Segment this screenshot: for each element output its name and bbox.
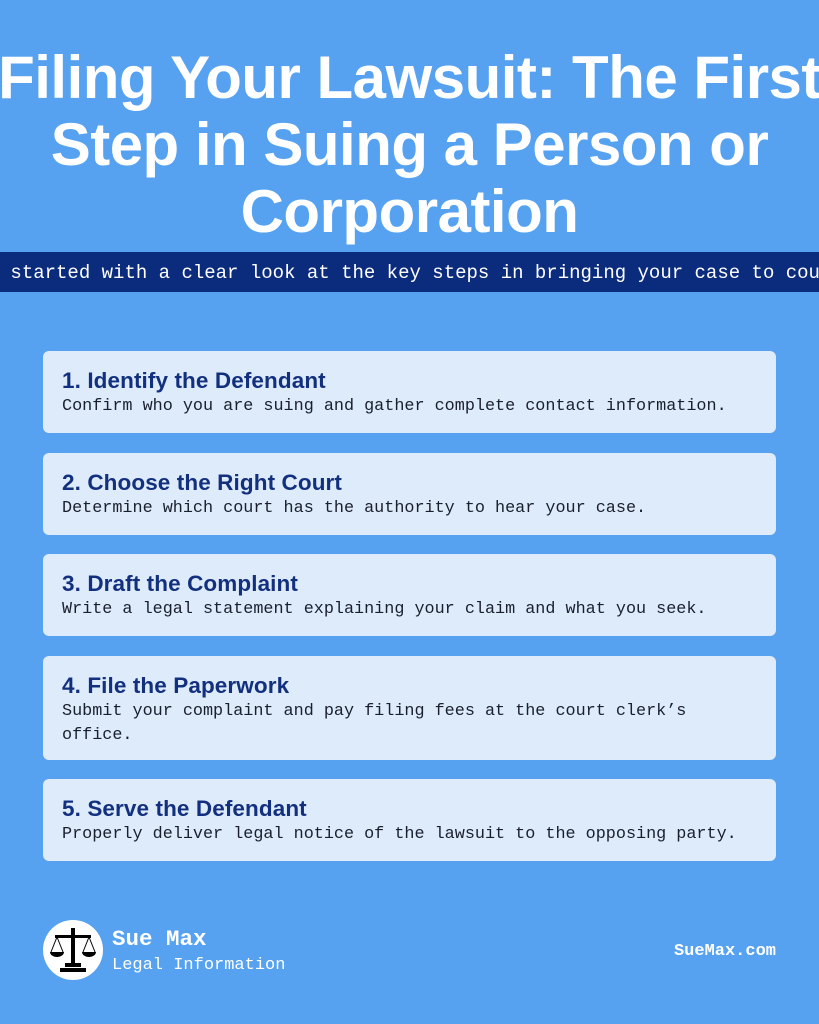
card: step 3 [43,554,776,636]
brand text [112,926,285,975]
card: step 1: Confirm who you are suing and gather complete contact information. [62,397,727,416]
subtitle banner [0,252,819,292]
brand text: Legal Information [112,956,285,975]
card: step 4 [43,656,776,760]
title: Corporation [241,178,578,245]
website: SueMax.com [674,942,776,961]
card: step 3: Write a legal statement explaining your claim and what you seek. [62,600,707,619]
card: step 2: Determine which court has the authority to hear your case. [62,499,646,518]
card: step 1 [43,351,776,433]
card: step 3: 3. Draft the Complaint [62,571,298,596]
card: step 5: 5. Serve the Defendant [62,796,307,821]
brand text: Sue Max [112,926,207,952]
icon: scales logo [43,920,103,980]
title: Step in Suing a Person or [51,111,768,178]
title: Filing Your Lawsuit: The First [0,44,819,111]
card: step 2: 2. Choose the Right Court [62,470,342,495]
card: step 4: Submit your complaint and pay filing fees at the court clerk’s office. [62,702,686,745]
title [0,44,819,245]
card: step 5: Properly deliver legal notice of the lawsuit to the opposing party. [62,825,737,844]
card: step 2 [43,453,776,535]
card: step 5 [43,779,776,861]
card: step 1: 1. Identify the Defendant [62,368,326,393]
card: step 4: 4. File the Paperwork [62,673,289,698]
